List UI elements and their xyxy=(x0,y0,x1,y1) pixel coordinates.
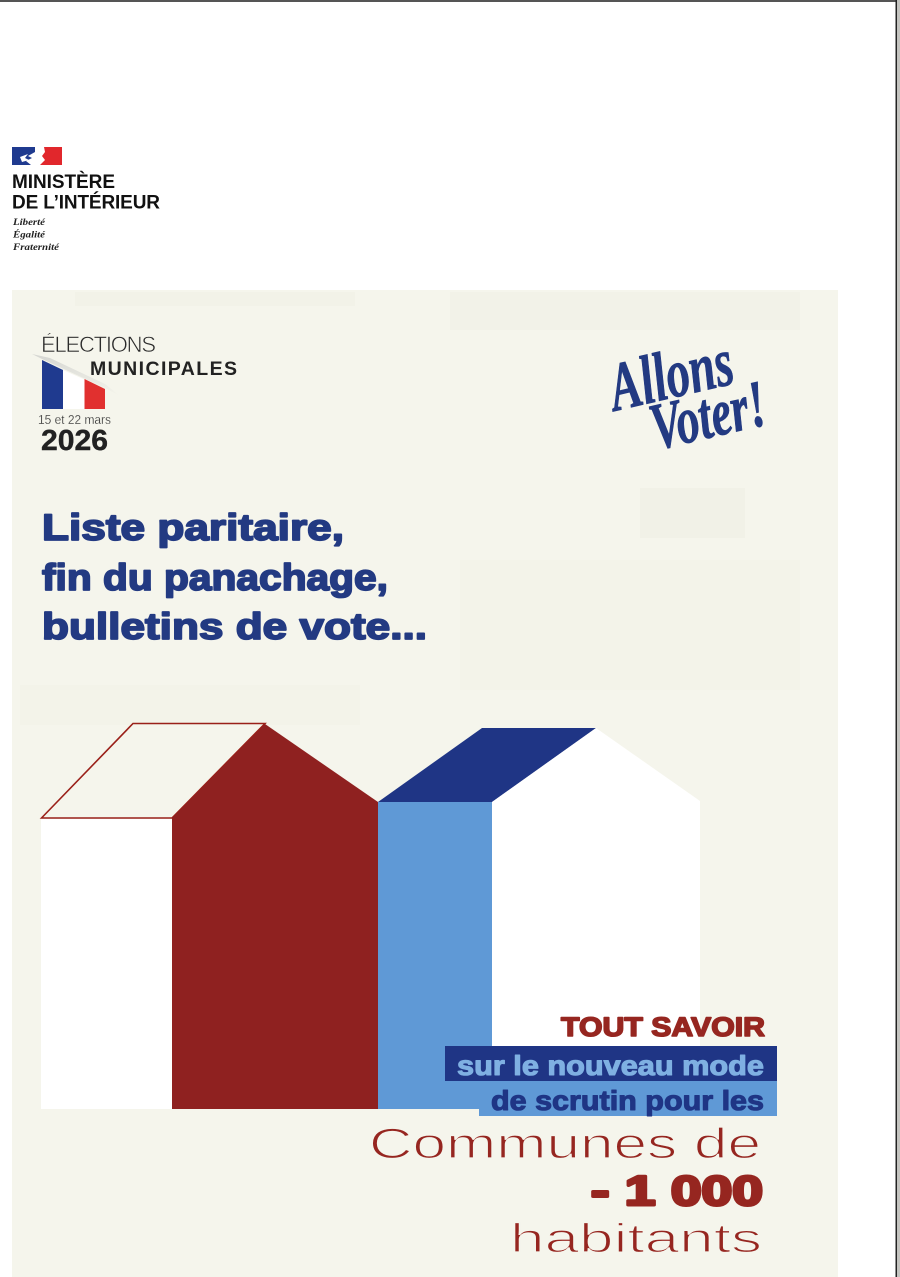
slogan: Allons Voter!: Voter! xyxy=(643,367,773,465)
panel: cream poster background xyxy=(12,290,838,1277)
light blue house body xyxy=(378,802,492,1109)
motto: Égalité xyxy=(12,228,46,240)
Municipales: MUNICIPALES xyxy=(90,358,237,380)
dark blue roof xyxy=(378,728,596,802)
red house xyxy=(172,724,378,1109)
ministry name: MINISTÈRE xyxy=(12,171,115,193)
light blue strip xyxy=(479,1081,777,1116)
slogan: Allons Voter!: Allons xyxy=(598,323,740,427)
icon: French flag xyxy=(42,360,105,409)
illustration: houses xyxy=(41,724,700,1109)
strip text: sur le nouveau mode xyxy=(457,1050,764,1081)
outlined roof xyxy=(42,724,265,818)
ministry name line 2: DE L’INTÉRIEUR xyxy=(12,192,160,214)
headline: communes de moins de 1000 habitants: Communes de xyxy=(369,1120,761,1168)
flag shadow xyxy=(32,354,120,396)
strip text: de scrutin pour les xyxy=(491,1085,764,1116)
callout: tout savoir xyxy=(445,1012,777,1116)
logo: Ministère de l'Intérieur xyxy=(12,147,160,253)
headline: communes de moins de 1000 habitants: - 1 000 xyxy=(591,1167,763,1214)
motto: Liberté xyxy=(12,218,46,228)
motto xyxy=(12,218,60,253)
title: bulletins de vote... xyxy=(42,606,427,647)
title xyxy=(42,507,427,647)
white house body left xyxy=(41,819,172,1109)
headline: communes de moins de 1000 habitants xyxy=(369,1120,763,1261)
icon: Marianne flag block xyxy=(12,147,62,165)
white house xyxy=(492,728,700,1046)
logo: Élections municipales 2026 xyxy=(32,332,237,457)
dates: 15 et 22 mars xyxy=(38,413,111,427)
dark blue strip xyxy=(445,1046,777,1081)
headline: communes de moins de 1000 habitants: habitants xyxy=(510,1215,762,1261)
heading: tout savoir: TOUT SAVOIR xyxy=(561,1012,765,1042)
slogan: Allons Voter! xyxy=(598,323,773,465)
year: 2026 xyxy=(41,425,108,457)
title: Liste paritaire, xyxy=(42,507,344,548)
title: fin du panachage, xyxy=(42,557,388,598)
Élections: ÉLECTIONS xyxy=(41,332,156,357)
motto: Fraternité xyxy=(12,243,60,253)
